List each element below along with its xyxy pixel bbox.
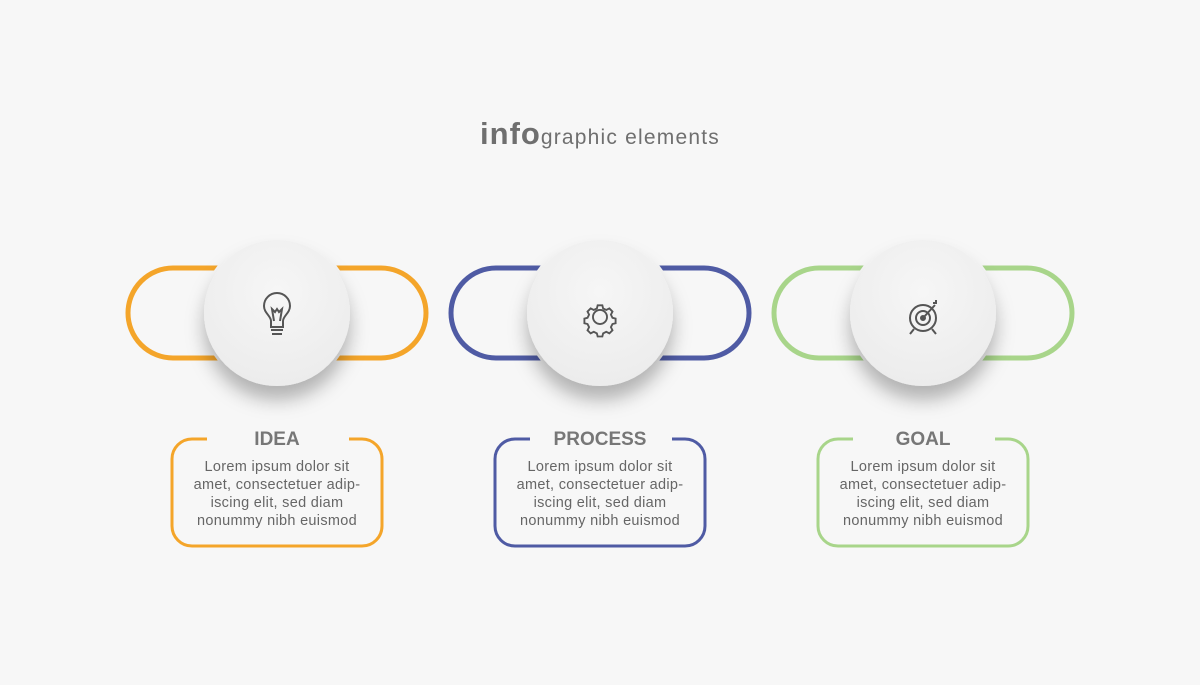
text block: Lorem ipsum dolor sit xyxy=(851,459,995,475)
text block: amet, consectetuer adip- xyxy=(517,477,683,493)
circle xyxy=(850,240,996,386)
capsule xyxy=(774,268,1072,358)
heading: IDEA xyxy=(254,429,300,450)
text block xyxy=(194,459,360,529)
box xyxy=(172,439,382,546)
panel: idea xyxy=(128,237,426,546)
text block: iscing elit, sed diam xyxy=(211,495,343,511)
box xyxy=(818,439,1028,546)
text block: nonummy nibh euismod xyxy=(197,513,357,529)
text block: iscing elit, sed diam xyxy=(534,495,666,511)
title: infographic elements xyxy=(480,116,720,151)
icon: gear xyxy=(584,305,616,336)
heading: GOAL xyxy=(896,429,951,450)
circle xyxy=(204,240,350,386)
text block: Lorem ipsum dolor sit xyxy=(205,459,349,475)
text block: Lorem ipsum dolor sit xyxy=(528,459,672,475)
text block: iscing elit, sed diam xyxy=(857,495,989,511)
icon: bulb xyxy=(264,293,290,334)
text block: nonummy nibh euismod xyxy=(520,513,680,529)
text block: nonummy nibh euismod xyxy=(843,513,1003,529)
icon: target xyxy=(910,300,936,334)
text block: amet, consectetuer adip- xyxy=(840,477,1006,493)
capsule xyxy=(451,268,749,358)
panel: process xyxy=(451,237,749,546)
heading: PROCESS xyxy=(554,429,646,450)
panel: goal xyxy=(774,237,1072,546)
text block xyxy=(517,459,683,529)
text block xyxy=(840,459,1006,529)
text block: amet, consectetuer adip- xyxy=(194,477,360,493)
circle xyxy=(527,240,673,386)
box xyxy=(495,439,705,546)
capsule xyxy=(128,268,426,358)
